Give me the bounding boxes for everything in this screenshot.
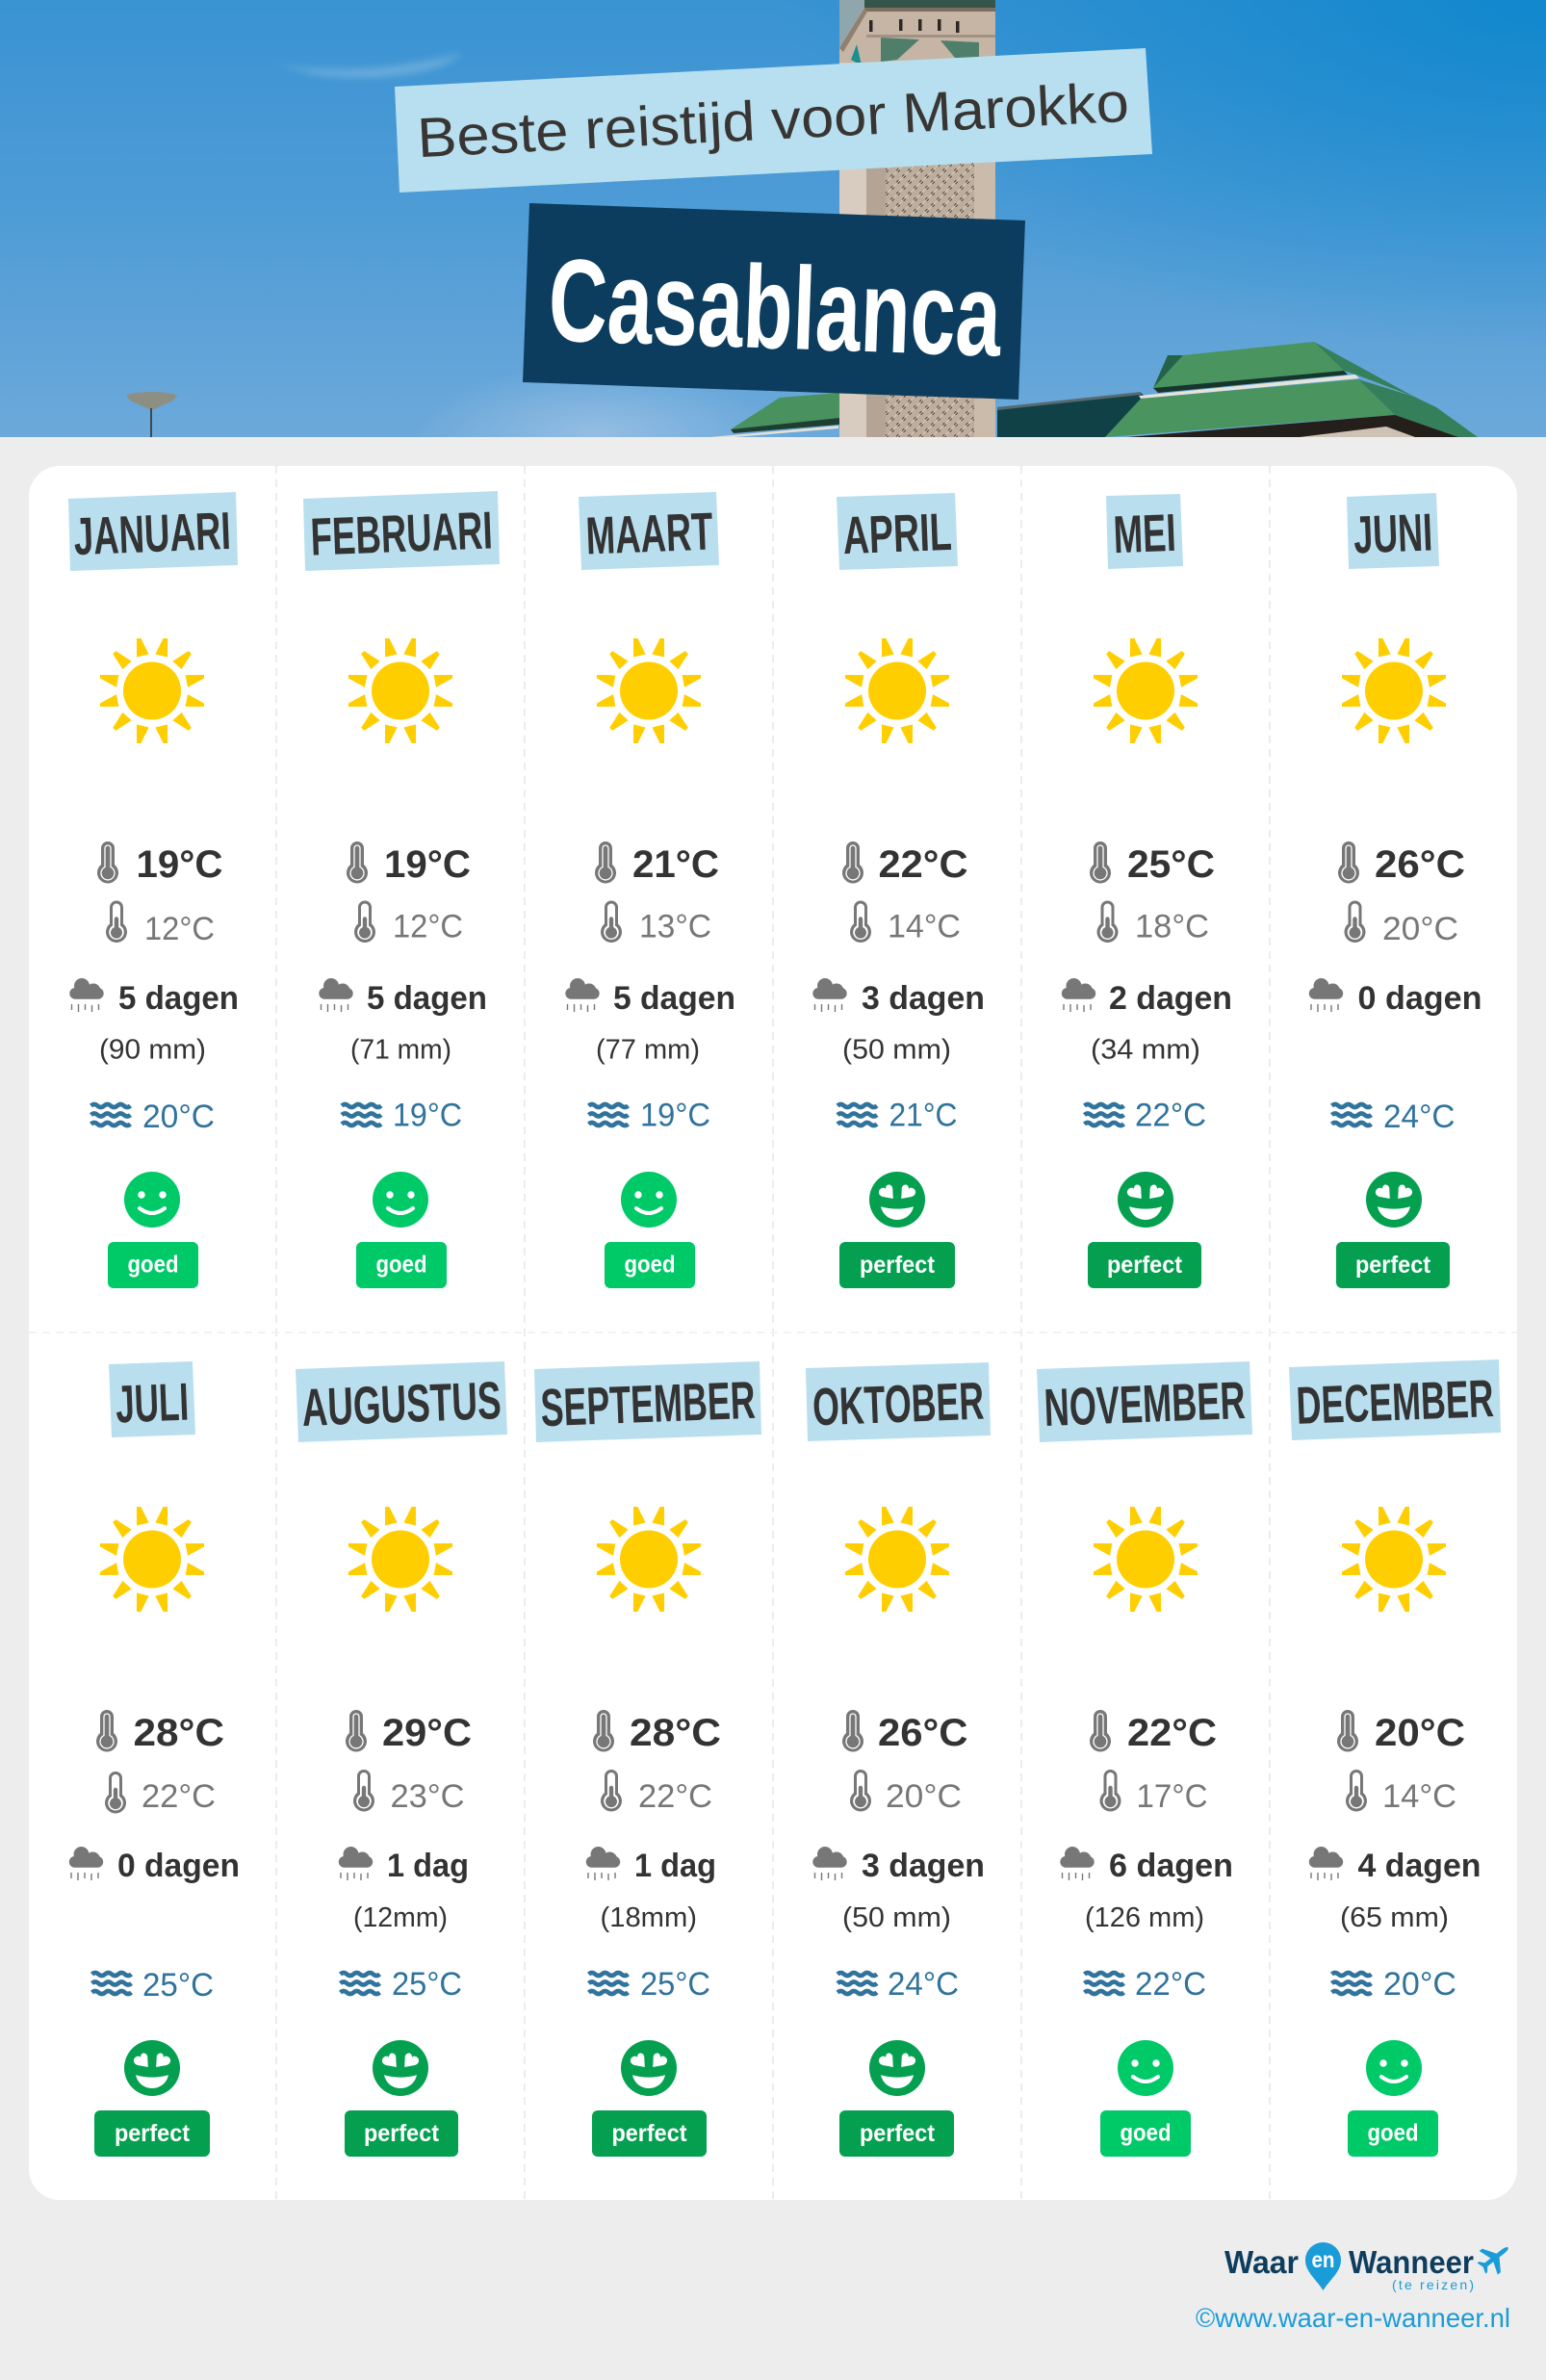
icon: sun — [100, 638, 204, 743]
month tag: NOVEMBER — [1043, 1370, 1247, 1437]
rainfall days: 1 dag — [634, 1848, 716, 1884]
rainfall amount: (77 mm) — [596, 1034, 700, 1065]
minimum temperature: 14°C — [1382, 1778, 1456, 1815]
month tag: OKTOBER — [812, 1371, 985, 1436]
minaret tower — [839, 0, 995, 437]
icon: sun — [597, 638, 701, 743]
minimum temperature — [1344, 901, 1458, 947]
rating: goed: goed — [1367, 2120, 1419, 2147]
sea temperature — [1332, 1966, 1456, 2003]
left roof — [710, 393, 839, 437]
month tag: JULI — [115, 1372, 190, 1434]
icon: sun — [1094, 638, 1198, 743]
rainfall amount: (50 mm) — [842, 1034, 951, 1065]
minimum temperature: 23°C — [391, 1778, 464, 1815]
rating: goed: goed — [1121, 2120, 1171, 2147]
right roof — [997, 342, 1478, 437]
rating: goed — [1348, 2040, 1438, 2157]
minimum temperature — [850, 1770, 962, 1815]
rainfall amount: (34 mm) — [1091, 1034, 1200, 1065]
sea temperature: 24°C — [888, 1966, 959, 2003]
maximum temperature: 21°C — [632, 843, 719, 886]
logo: Waar en Wanneer: Wanneer — [1349, 2244, 1474, 2280]
panel: februari — [303, 491, 500, 1288]
month tag — [1347, 493, 1439, 569]
sea temperature: 25°C — [142, 1967, 214, 2004]
minimum temperature: 18°C — [1135, 909, 1209, 945]
month tag: FEBRUARI — [309, 500, 494, 567]
rainfall days: 0 dagen — [117, 1848, 240, 1884]
maximum temperature: 28°C — [133, 1712, 224, 1754]
month tag — [296, 1361, 507, 1442]
minimum temperature — [601, 901, 711, 945]
sea temperature — [92, 1967, 214, 2004]
icon: sun — [597, 1507, 701, 1612]
month tag: AUGUSTUS — [300, 1370, 502, 1437]
rating: goed: goed — [375, 1252, 427, 1279]
sea temperature: 24°C — [1383, 1099, 1456, 1135]
rainfall days — [1309, 1847, 1481, 1884]
rating: goed: goed — [624, 1252, 676, 1279]
rainfall days: 0 dagen — [1357, 980, 1482, 1017]
month tag — [109, 1361, 195, 1437]
sea temperature — [837, 1966, 959, 2003]
panel: april — [812, 493, 985, 1288]
logo: Waar en Wanneer — [1224, 2236, 1517, 2292]
maximum temperature: 25°C — [1127, 843, 1215, 886]
month tag: APRIL — [841, 502, 953, 565]
sea temperature: 19°C — [393, 1098, 462, 1134]
icon: sun — [1342, 1507, 1446, 1612]
minimum temperature: 22°C — [142, 1778, 216, 1815]
rating: perfect — [839, 1172, 955, 1288]
rainfall days — [339, 1847, 469, 1884]
rating: goed: goed — [127, 1252, 179, 1279]
title banner — [523, 203, 1025, 400]
icon: sun — [845, 1507, 949, 1612]
rainfall days: 5 dagen — [613, 980, 735, 1017]
sea temperature — [1332, 1099, 1456, 1135]
rating: perfect: perfect — [1355, 1252, 1431, 1279]
panel: mei — [1062, 494, 1232, 1288]
maximum temperature — [842, 841, 968, 886]
minimum temperature: 14°C — [888, 909, 961, 945]
panel: september — [534, 1361, 761, 2157]
rating: goed — [356, 1172, 447, 1288]
rating: perfect: perfect — [364, 2120, 440, 2147]
month tag — [1037, 1361, 1252, 1442]
month tag — [303, 491, 500, 571]
maximum temperature — [346, 1710, 472, 1754]
rating: perfect: perfect — [115, 2120, 191, 2147]
sea temperature: 22°C — [1135, 1098, 1206, 1134]
rainfall amount: (50 mm) — [842, 1902, 951, 1933]
logo: Waar en Wanneer: (te reizen) — [1392, 2277, 1474, 2292]
logo: Waar en Wanneer: Waar — [1224, 2244, 1299, 2280]
subtitle banner: Beste reistijd voor Marokko — [416, 71, 1130, 169]
title banner: Casablanca — [547, 234, 1004, 381]
maximum temperature — [595, 841, 719, 886]
panel: januari — [68, 492, 239, 1288]
sea temperature: 21°C — [889, 1098, 957, 1134]
minimum temperature: 20°C — [886, 1778, 962, 1815]
sea temperature — [90, 1099, 215, 1135]
minimum temperature: 17°C — [1136, 1778, 1207, 1815]
maximum temperature: 28°C — [630, 1712, 721, 1754]
sea temperature — [837, 1098, 957, 1134]
panel: juli — [69, 1361, 240, 2157]
rainfall days: 1 dag — [387, 1848, 469, 1884]
rainfall days — [1062, 978, 1232, 1017]
rating: goed — [1100, 2040, 1191, 2157]
minimum temperature: 12°C — [393, 909, 463, 945]
sea temperature — [342, 1098, 462, 1134]
rating: goed — [605, 1172, 695, 1288]
month tag: SEPTEMBER — [539, 1370, 757, 1437]
maximum temperature — [1338, 841, 1465, 886]
minimum temperature — [1346, 1770, 1456, 1815]
sea temperature: 19°C — [640, 1098, 710, 1134]
panel: december — [1289, 1359, 1501, 2157]
minimum temperature — [850, 901, 961, 945]
month tag — [579, 492, 719, 570]
sea temperature — [589, 1966, 710, 2003]
rainfall days — [69, 1847, 240, 1884]
rainfall days — [812, 1847, 985, 1884]
minimum temperature — [354, 901, 463, 945]
minimum temperature — [601, 1770, 712, 1815]
minimum temperature — [105, 1772, 216, 1815]
sea temperature — [341, 1966, 462, 2003]
maximum temperature: 22°C — [1127, 1712, 1217, 1754]
rainfall days — [586, 1847, 716, 1884]
sea temperature: 25°C — [640, 1966, 710, 2003]
rainfall amount: (65 mm) — [1340, 1902, 1449, 1933]
panel: juni — [1309, 493, 1482, 1288]
rainfall amount: (126 mm) — [1085, 1902, 1204, 1933]
rating: perfect — [1088, 1172, 1201, 1288]
maximum temperature: 19°C — [384, 843, 471, 886]
maximum temperature — [347, 841, 471, 886]
icon: sun — [348, 638, 452, 743]
panel: maart — [565, 492, 735, 1288]
rainfall amount: (12mm) — [353, 1902, 448, 1933]
rainfall days: 6 dagen — [1109, 1848, 1233, 1884]
rainfall days — [69, 978, 239, 1017]
rainfall days — [1309, 978, 1482, 1017]
maximum temperature: 29°C — [382, 1712, 472, 1754]
month tag — [68, 492, 238, 571]
maximum temperature: 19°C — [137, 843, 223, 886]
sea temperature: 20°C — [142, 1099, 215, 1135]
rainfall days: 2 dagen — [1109, 980, 1232, 1017]
icon: map pin: en — [1311, 2247, 1334, 2272]
month tag: JANUARI — [72, 501, 232, 566]
rainfall amount: (71 mm) — [350, 1034, 451, 1065]
icon: sun — [1342, 638, 1446, 743]
maximum temperature — [96, 1710, 224, 1754]
rating: perfect — [345, 2040, 458, 2157]
minimum temperature — [1097, 901, 1209, 945]
rainfall days — [565, 978, 735, 1017]
rating: goed — [108, 1172, 198, 1288]
maximum temperature: 20°C — [1375, 1712, 1465, 1754]
sea temperature: 25°C — [392, 1966, 462, 2003]
maximum temperature: 26°C — [1375, 843, 1465, 886]
icon: airplane — [1472, 2236, 1517, 2280]
month tag — [534, 1361, 761, 1442]
rating: perfect — [592, 2040, 707, 2157]
minimum temperature: 13°C — [639, 909, 711, 945]
sea temperature — [589, 1098, 710, 1134]
panel: oktober — [806, 1362, 991, 2157]
rating: perfect: perfect — [1107, 1252, 1183, 1279]
lamp post — [126, 392, 177, 437]
minimum temperature: 20°C — [1382, 911, 1458, 947]
month tag: MAART — [584, 501, 714, 566]
icon: sun — [348, 1507, 452, 1612]
minimum temperature: 22°C — [638, 1778, 712, 1815]
maximum temperature — [1090, 1710, 1217, 1754]
rainfall days — [1060, 1847, 1233, 1884]
maximum temperature: 26°C — [878, 1712, 968, 1754]
maximum temperature: 22°C — [878, 843, 968, 886]
minimum temperature — [1099, 1770, 1207, 1815]
minimum temperature: 12°C — [144, 911, 215, 947]
subtitle banner — [395, 48, 1152, 193]
website credit: ©www.waar-en-wanneer.nl — [1196, 2303, 1510, 2333]
header photo: Hassan II mosque against blue sky — [0, 0, 1546, 437]
sea temperature: 20°C — [1383, 1966, 1456, 2003]
rainfall amount: (18mm) — [601, 1902, 697, 1933]
rainfall days: 4 dagen — [1357, 1848, 1481, 1884]
rainfall days: 3 dagen — [862, 980, 985, 1017]
rainfall days — [319, 978, 487, 1017]
maximum temperature — [842, 1710, 968, 1754]
icon: map pin — [1305, 2242, 1341, 2290]
rating: perfect — [1336, 1172, 1450, 1288]
rainfall days: 5 dagen — [118, 980, 239, 1017]
rating: perfect: perfect — [612, 2120, 687, 2147]
maximum temperature — [1090, 841, 1215, 886]
minimum temperature — [353, 1770, 464, 1815]
rainfall days: 3 dagen — [862, 1848, 985, 1884]
panel: november — [1037, 1361, 1252, 2157]
rating: perfect — [94, 2040, 210, 2157]
month tag — [1106, 494, 1183, 569]
rating: perfect: perfect — [860, 1252, 936, 1279]
icon: sun — [845, 638, 949, 743]
sea temperature — [1084, 1098, 1206, 1134]
sea temperature: 22°C — [1135, 1966, 1206, 2003]
rainfall days — [812, 978, 985, 1017]
maximum temperature — [593, 1710, 721, 1754]
maximum temperature — [1337, 1710, 1465, 1754]
minimum temperature — [106, 901, 215, 947]
rating: perfect: perfect — [860, 2120, 936, 2147]
month tag — [837, 493, 958, 570]
icon: sun — [1094, 1507, 1198, 1612]
month tag — [806, 1362, 991, 1441]
rainfall amount: (90 mm) — [99, 1034, 206, 1065]
icon: sun — [100, 1507, 204, 1612]
month tag: JUNI — [1353, 502, 1433, 565]
sea temperature — [1084, 1966, 1206, 2003]
month tag: MEI — [1112, 503, 1177, 564]
panel: augustus — [296, 1361, 507, 2157]
rating: perfect — [839, 2040, 954, 2157]
rainfall days: 5 dagen — [367, 980, 487, 1017]
white calendar card — [29, 466, 1517, 2200]
maximum temperature — [97, 841, 223, 886]
